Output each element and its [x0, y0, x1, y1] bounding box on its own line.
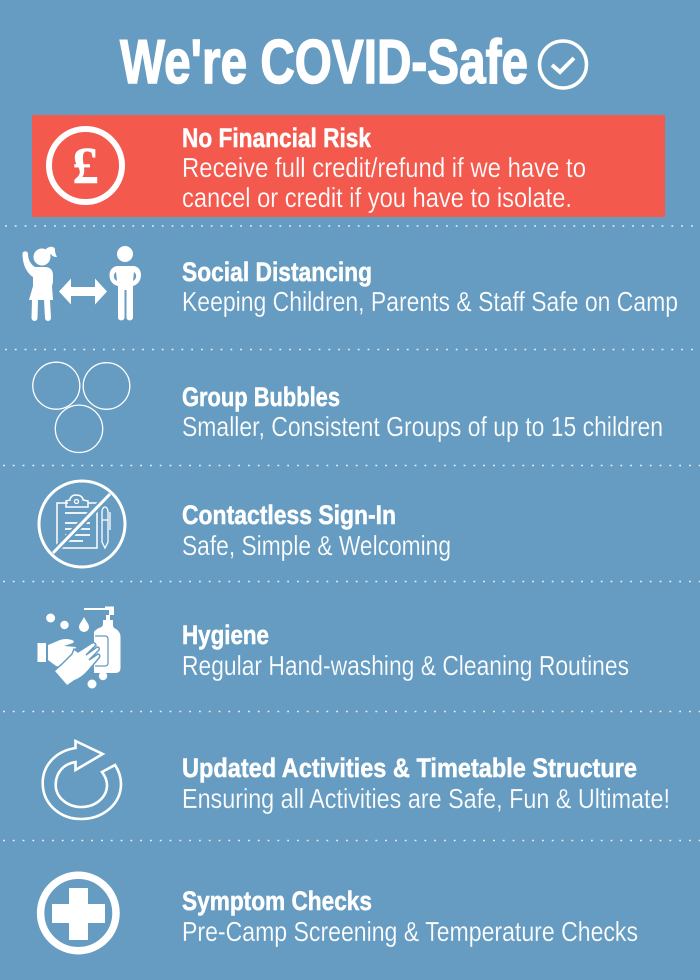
- icon: clipboard crossed out: [39, 481, 125, 567]
- icon: two people with arrow: [22, 246, 141, 321]
- text: no financial risk: No Financial Risk: [182, 123, 372, 153]
- text: social distancing: [182, 257, 678, 317]
- icon: hand washing with soap: [38, 606, 120, 688]
- text: updated activities: [182, 753, 670, 814]
- text: group bubbles: Group Bubbles: [182, 382, 340, 412]
- text: hygiene: Hygiene: [182, 620, 269, 650]
- panel: group bubbles: [33, 362, 663, 452]
- text: no financial risk: Receive full credit/refund if we have to: [182, 152, 586, 183]
- panel: no financial risk: [32, 115, 665, 217]
- text: contactless sign-in: Safe, Simple & Welcoming: [182, 530, 451, 561]
- text: contactless sign-in: [182, 500, 451, 561]
- icon: check mark in circle: [540, 41, 586, 88]
- panel: hygiene: [38, 606, 629, 688]
- icon: circular arrow: [43, 741, 121, 819]
- text: contactless sign-in: Contactless Sign-In: [182, 500, 396, 530]
- panel: social distancing: [22, 246, 678, 321]
- icon: pound in circle: [49, 129, 122, 202]
- text: group bubbles: [182, 382, 663, 442]
- icon: medical cross: [41, 875, 116, 951]
- text: no financial risk: [182, 123, 586, 213]
- text: social distancing: Social Distancing: [182, 257, 372, 287]
- title: We're COVID-Safe: [120, 28, 528, 97]
- text: symptom checks: Symptom Checks: [182, 886, 372, 916]
- icon: three circles: [33, 362, 130, 452]
- text: updated activities: Updated Activities & Timetable Structure: [182, 753, 637, 783]
- panel: symptom checks: [41, 875, 638, 951]
- panel: updated activities: [43, 741, 670, 819]
- icon: pound in circle: £: [72, 138, 98, 195]
- text: hygiene: [182, 620, 629, 681]
- text: symptom checks: [182, 886, 638, 947]
- panel: contactless sign-in: [39, 481, 451, 567]
- text: no financial risk: cancel or credit if you have to isolate.: [182, 182, 572, 213]
